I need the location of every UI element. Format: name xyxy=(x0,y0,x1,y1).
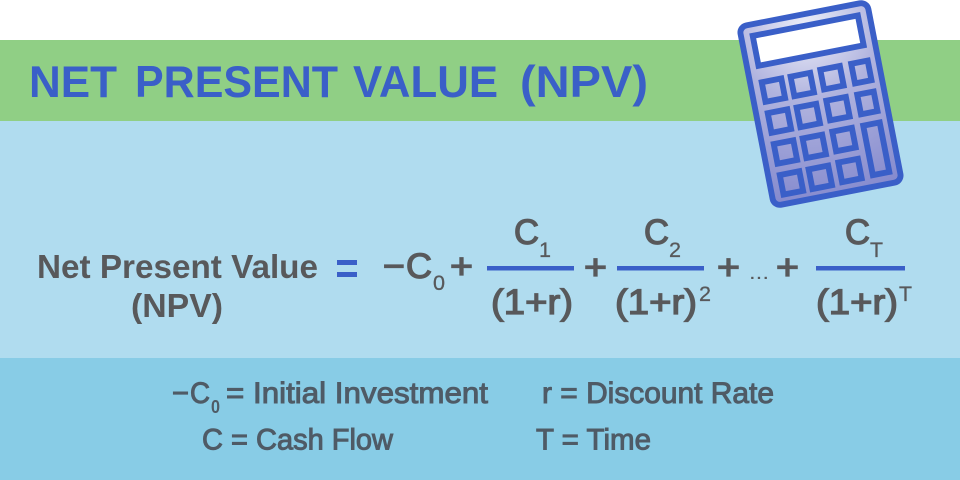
plus ellipsis plus: + xyxy=(717,248,740,287)
term: minus C0 plus: + xyxy=(450,247,473,286)
panel: formula band xyxy=(0,121,960,358)
background: white top band xyxy=(0,0,960,40)
legend: initial investment: 0 xyxy=(211,397,220,417)
formula label: Net Present Value (NPV): Net Present Value xyxy=(37,248,318,285)
formula label: Net Present Value (NPV) xyxy=(37,248,318,324)
fraction 2: C xyxy=(644,213,669,252)
term: minus C0 plus: C xyxy=(406,247,432,286)
formula label: Net Present Value (NPV): (NPV) xyxy=(131,287,223,324)
fraction 1: C xyxy=(514,213,539,252)
panel: legend band xyxy=(0,358,960,480)
fraction T xyxy=(816,213,912,322)
fraction 2: (1+r) xyxy=(615,283,697,322)
fraction 2 xyxy=(615,213,711,322)
fraction 1: (1+r) xyxy=(491,283,573,322)
fraction 2: 2 xyxy=(669,239,681,262)
fraction 2: 2 xyxy=(699,283,711,306)
legend: time: T = Time xyxy=(536,424,651,456)
icon: calculator xyxy=(739,2,902,206)
panel: green title band xyxy=(0,40,960,121)
fraction 1 xyxy=(487,213,574,322)
legend: cash flow: C = Cash Flow xyxy=(202,424,393,456)
fraction T: T xyxy=(870,239,883,262)
fraction T: T xyxy=(899,283,912,306)
plus ellipsis plus: + xyxy=(776,248,799,287)
legend: discount rate: r = Discount Rate xyxy=(542,377,774,410)
term: minus C0 plus: 0 xyxy=(433,272,445,295)
fraction 1: 1 xyxy=(539,239,551,262)
equals sign xyxy=(337,260,357,277)
term: minus C0 plus xyxy=(383,247,473,295)
title xyxy=(29,58,648,107)
legend: initial investment xyxy=(172,377,489,417)
term: minus C0 plus: − xyxy=(383,247,405,286)
plus ellipsis plus: ... xyxy=(749,262,769,284)
legend: initial investment: = Initial Investment xyxy=(226,377,489,410)
plus ellipsis plus xyxy=(717,248,799,287)
legend: initial investment: − xyxy=(172,377,189,410)
title: (NPV) xyxy=(520,58,648,107)
title: VALUE xyxy=(353,58,498,107)
fraction T: C xyxy=(845,213,870,252)
legend: initial investment: C xyxy=(190,377,210,410)
plus: + xyxy=(584,248,607,287)
fraction T: (1+r) xyxy=(816,283,898,322)
title: PRESENT xyxy=(135,58,338,107)
title: NET xyxy=(29,58,117,107)
